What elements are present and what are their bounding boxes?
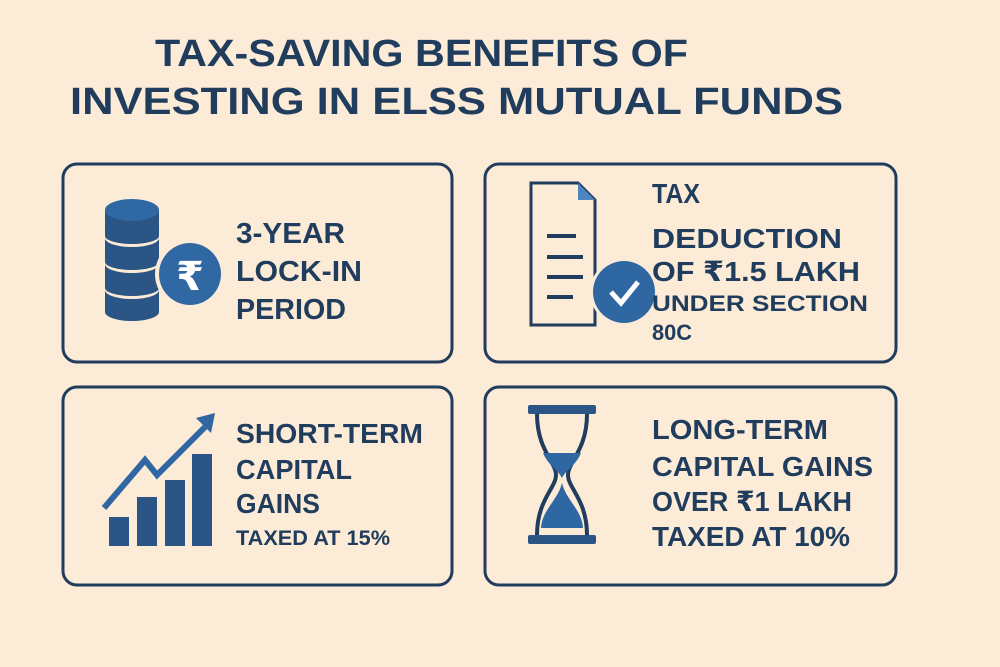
text: tax deduction: OF ₹1.5 LAKH — [652, 256, 860, 287]
text: long-term: LONG-TERM — [652, 414, 828, 445]
title — [70, 33, 843, 123]
text: long-term: TAXED AT 10% — [652, 521, 850, 552]
icon: bar chart with arrow — [104, 413, 215, 546]
text: lock-in: LOCK-IN — [236, 256, 362, 288]
panel: tax deduction — [485, 164, 896, 362]
text: tax deduction: DEDUCTION — [652, 223, 842, 254]
text: short-term: CAPITAL — [236, 454, 352, 485]
title: TAX-SAVING BENEFITS OF — [155, 33, 688, 75]
panel: long-term capital gains — [485, 387, 896, 585]
text: lock-in: 3-YEAR — [236, 218, 345, 250]
text: long-term — [652, 414, 873, 552]
icon: document with check — [531, 183, 658, 326]
panel: lock-in period — [63, 164, 452, 362]
text: tax deduction — [652, 178, 868, 345]
panel: short-term capital gains — [63, 387, 452, 585]
text: long-term: CAPITAL GAINS — [652, 451, 873, 482]
text: short-term: TAXED AT 15% — [236, 527, 390, 550]
icon: coin stack with rupee: ₹ — [176, 254, 204, 300]
text: tax deduction: UNDER SECTION — [652, 291, 868, 316]
text: short-term: SHORT-TERM — [236, 418, 423, 449]
text: tax deduction: 80C — [652, 320, 692, 345]
title: INVESTING IN ELSS MUTUAL FUNDS — [70, 81, 843, 123]
icon: hourglass — [528, 405, 596, 544]
icon: coin stack with rupee — [105, 199, 225, 321]
text: short-term: GAINS — [236, 488, 320, 519]
text: long-term: OVER ₹1 LAKH — [652, 486, 852, 517]
text: short-term — [236, 418, 423, 550]
text: lock-in: PERIOD — [236, 294, 346, 326]
text: tax deduction: TAX — [652, 178, 700, 209]
text: lock-in — [236, 218, 362, 326]
